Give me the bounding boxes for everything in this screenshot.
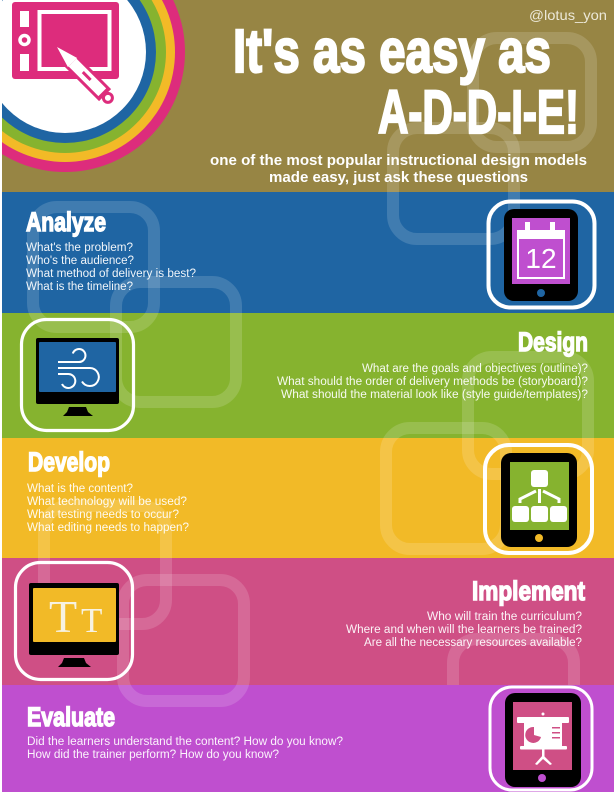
- develop questions: What technology will be used?: [27, 496, 187, 508]
- analyze questions: [26, 242, 196, 293]
- analyze questions: What's the problem?: [26, 242, 133, 254]
- title: [233, 17, 579, 146]
- heading: implement: Implement: [472, 576, 585, 606]
- analyze questions: What is the timeline?: [26, 281, 133, 293]
- develop questions: What editing needs to happen?: [27, 522, 189, 534]
- icon: tablet with presentation: [490, 687, 592, 790]
- icon: monitor with wind: [22, 320, 134, 430]
- icon: drawing tablet and pen: [12, 2, 119, 107]
- icon: tablet with calendar: [488, 202, 594, 308]
- develop questions: What is the content?: [27, 483, 133, 495]
- implement questions: [346, 611, 582, 649]
- heading: design: Design: [518, 327, 588, 357]
- evaluate questions: Did the learners understand the content? How do you know?: [27, 736, 343, 748]
- credit handle: @lotus_yon: [529, 7, 607, 23]
- icon: monitor with typography: T: [81, 601, 102, 640]
- subtitle: [210, 153, 587, 186]
- subtitle: one of the most popular instructional design models: [210, 153, 587, 169]
- rainbow circle badge: [0, 0, 185, 172]
- analyze questions: What method of delivery is best?: [26, 268, 196, 280]
- panel: design: [22, 320, 588, 430]
- panel: evaluate: [27, 687, 592, 790]
- icon: monitor with typography: [16, 562, 132, 680]
- design questions: What are the goals and objectives (outline)?: [362, 363, 588, 375]
- subtitle: made easy, just ask these questions: [269, 170, 528, 186]
- develop questions: What testing needs to occur?: [27, 509, 179, 521]
- implement questions: Where and when will the learners be trained?: [346, 624, 582, 636]
- implement questions: Are all the necessary resources available?: [364, 637, 582, 649]
- heading: analyze: Analyze: [26, 207, 106, 237]
- implement questions: Who will train the curriculum?: [427, 611, 582, 623]
- design questions: What should the order of delivery methods be (storyboard)?: [277, 376, 588, 388]
- heading: evaluate: Evaluate: [27, 702, 115, 732]
- panel: implement: [16, 562, 585, 680]
- evaluate questions: [27, 736, 343, 761]
- analyze questions: Who's the audience?: [26, 255, 134, 267]
- panel: analyze: [26, 202, 594, 308]
- icon: tablet with org chart: [485, 445, 592, 553]
- design questions: [277, 363, 588, 401]
- icon: tablet with calendar: 12: [525, 243, 557, 274]
- icon: monitor with typography: T: [49, 591, 77, 642]
- heading: develop: Develop: [28, 447, 110, 477]
- design questions: What should the material look like (style guide/templates)?: [281, 389, 588, 401]
- evaluate questions: How did the trainer perform? How do you know?: [27, 749, 279, 761]
- develop questions: [27, 483, 189, 534]
- panel: develop: [27, 445, 592, 553]
